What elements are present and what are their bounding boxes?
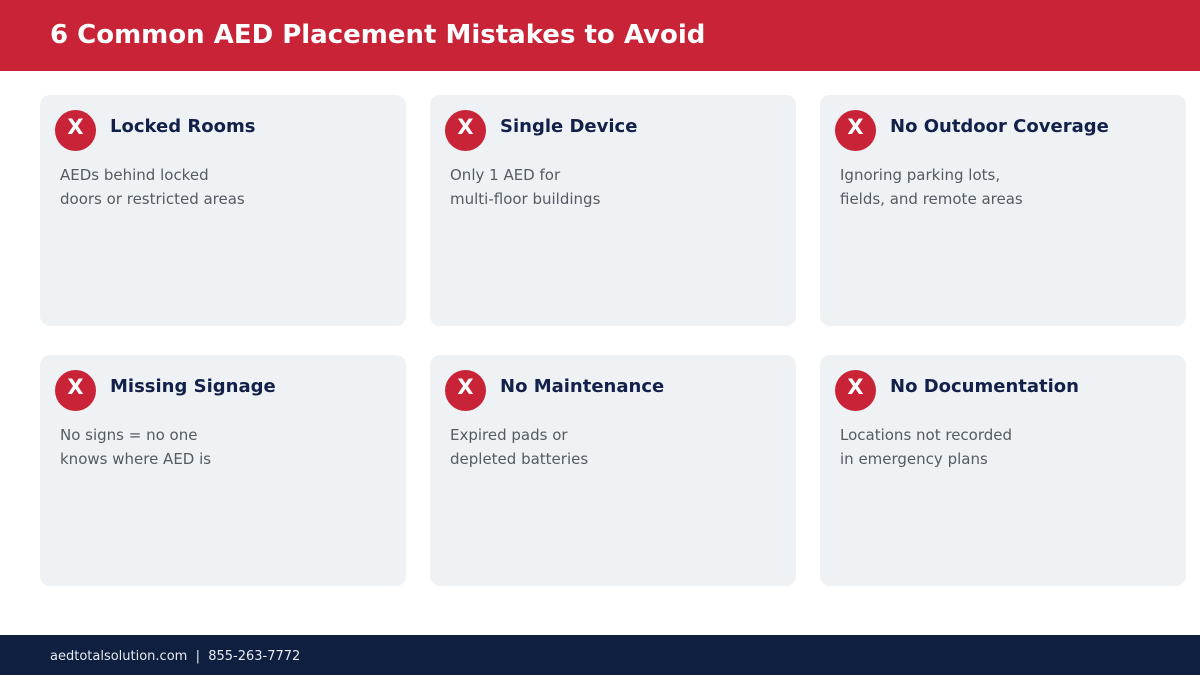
panel: no outdoor coverage xyxy=(820,95,1186,326)
text block xyxy=(450,426,588,468)
text block xyxy=(450,166,600,208)
icon: red X: X xyxy=(847,375,864,399)
heading: Single Device xyxy=(500,116,637,137)
header bar xyxy=(0,0,1200,71)
text block xyxy=(840,166,1023,208)
text block: Ignoring parking lots, xyxy=(840,166,1000,184)
panel: single device xyxy=(430,95,796,326)
title: 6 Common AED Placement Mistakes to Avoid xyxy=(50,20,705,50)
text block xyxy=(840,426,1012,468)
text block: doors or restricted areas xyxy=(60,190,245,208)
text block: No signs = no one xyxy=(60,426,197,444)
heading: Missing Signage xyxy=(110,376,276,397)
heading: Locked Rooms xyxy=(110,116,255,137)
icon: red X xyxy=(835,370,876,411)
panel: missing signage xyxy=(40,355,406,586)
icon: red X: X xyxy=(457,375,474,399)
icon: red X xyxy=(55,110,96,151)
icon: red X xyxy=(55,370,96,411)
text block: in emergency plans xyxy=(840,450,988,468)
text block: Locations not recorded xyxy=(840,426,1012,444)
text block: knows where AED is xyxy=(60,450,211,468)
text block: multi-floor buildings xyxy=(450,190,600,208)
heading: No Maintenance xyxy=(500,376,664,397)
icon: red X xyxy=(445,370,486,411)
icon: red X xyxy=(445,110,486,151)
heading: No Outdoor Coverage xyxy=(890,116,1109,137)
icon: red X xyxy=(835,110,876,151)
icon: red X: X xyxy=(67,115,84,139)
icon: red X: X xyxy=(457,115,474,139)
text block: AEDs behind locked xyxy=(60,166,209,184)
text block: fields, and remote areas xyxy=(840,190,1023,208)
icon: red X: X xyxy=(847,115,864,139)
text block: Only 1 AED for xyxy=(450,166,560,184)
text block xyxy=(60,426,211,468)
text block xyxy=(60,166,245,208)
text block: Expired pads or xyxy=(450,426,568,444)
text block: depleted batteries xyxy=(450,450,588,468)
heading: No Documentation xyxy=(890,376,1079,397)
panel: locked rooms xyxy=(40,95,406,326)
icon: red X: X xyxy=(67,375,84,399)
panel: no documentation xyxy=(820,355,1186,586)
footer text: aedtotalsolution.com | 855-263-7772 xyxy=(50,649,300,664)
panel: no maintenance xyxy=(430,355,796,586)
footer bar xyxy=(0,635,1200,675)
